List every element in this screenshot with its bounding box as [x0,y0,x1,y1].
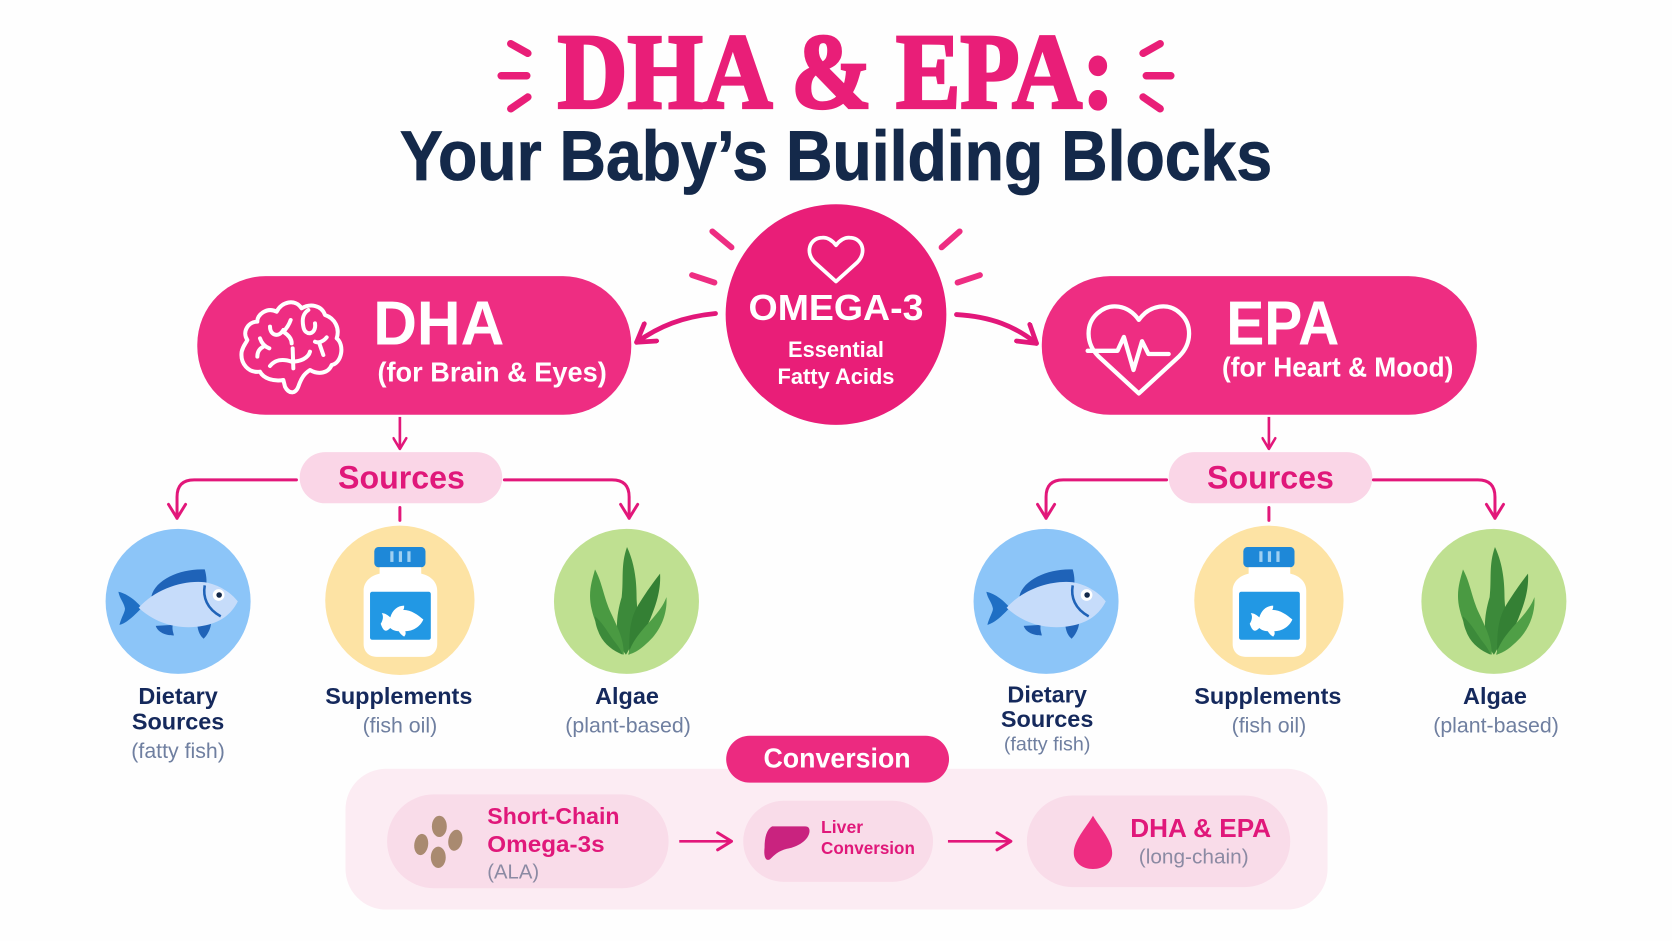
label: EPA algae: (plant-based) [1433,714,1559,738]
label: DHA dietary sources: Sources [132,708,224,734]
icon: DHA supplement circle [325,526,475,675]
label: DHA dietary sources: (fatty fish) [131,739,225,763]
panel: EPA pill [1042,276,1477,415]
DHA source connectors [177,480,629,520]
icon: EPA supplement circle [1194,526,1344,675]
omega-3 rays [692,231,980,283]
arrow: EPA to sources [1268,417,1270,449]
label: EPA algae: Algae [1463,683,1527,709]
label: DHA dietary sources [131,683,225,763]
conversion heading pill [726,736,949,783]
arrow: step 2 to 3 [948,840,1011,843]
DHA label: DHA [373,289,504,358]
arrow: omega-3 to DHA [637,313,716,342]
omega-3 subtitle line 2: Fatty Acids [778,364,894,389]
label: DHA algae: (plant-based) [565,714,691,738]
omega-3 subtitle line 1: Essential [788,337,884,362]
icon: DHA algae circle [554,529,699,674]
arrow: omega-3 to EPA [956,315,1036,343]
EPA sources pill: Sources [1207,459,1334,495]
label: EPA algae [1433,683,1559,738]
label: DHA dietary sources: Dietary [138,683,218,709]
step: DHA & EPA long-chain [1027,795,1290,887]
label: DHA supplements [325,683,472,738]
subtitle: Your Baby’s Building Blocks [400,116,1272,195]
DHA subtitle: (for Brain & Eyes) [377,357,607,388]
step: DHA & EPA long-chain: (long-chain) [1139,847,1249,869]
EPA sources pill [1169,452,1372,503]
panel: omega-3 circle [726,204,946,425]
EPA subtitle: (for Heart & Mood) [1222,351,1453,382]
EPA source connectors [1046,480,1495,520]
step: short-chain omega-3s [387,794,669,888]
panel: DHA pill [197,276,631,415]
label: EPA supplements [1194,683,1341,738]
EPA label: EPA [1226,289,1339,358]
icon: DHA fish circle [106,529,251,674]
title: DHA & EPA [501,14,1171,132]
label: EPA supplements: Supplements [1194,683,1341,709]
label: DHA algae [565,683,691,738]
step: short-chain omega-3s: Short-Chain [487,803,620,829]
icon: brain [241,302,341,392]
title burst: left [501,44,528,109]
arrow: step 1 to 2 [679,840,732,843]
icon: heart [809,238,863,282]
label: DHA algae: Algae [595,683,659,709]
label: EPA dietary sources [1001,682,1093,756]
title burst: right [1143,44,1171,109]
conversion heading pill: Conversion [763,743,911,774]
icon: droplet [1074,816,1112,869]
step: liver conversion [743,801,933,882]
step: short-chain omega-3s: (ALA) [487,862,539,884]
label: EPA dietary sources: Dietary [1007,682,1087,708]
step: DHA & EPA long-chain: DHA & EPA [1130,815,1271,843]
icon: seeds [413,816,464,868]
label: DHA supplements: Supplements [325,683,472,709]
DHA sources pill: Sources [338,459,465,495]
step: liver conversion: Conversion [821,838,915,858]
omega-3 label: OMEGA-3 [749,287,923,328]
label: EPA dietary sources: Sources [1001,706,1093,732]
label: DHA supplements: (fish oil) [363,714,437,738]
panel: conversion [346,736,1328,910]
icon: liver [764,826,810,860]
DHA sources pill [300,452,502,503]
icon: heart with pulse [1088,306,1189,393]
arrow: DHA to sources [399,417,401,449]
label: EPA supplements: (fish oil) [1232,714,1306,738]
title heading text: DHA & EPA: [558,14,1114,132]
step: short-chain omega-3s: Omega-3s [487,831,605,857]
label: EPA dietary sources: (fatty fish) [1004,734,1090,756]
icon: EPA fish circle [974,529,1119,674]
icon: EPA algae circle [1421,529,1566,674]
step: liver conversion: Liver [821,817,863,837]
